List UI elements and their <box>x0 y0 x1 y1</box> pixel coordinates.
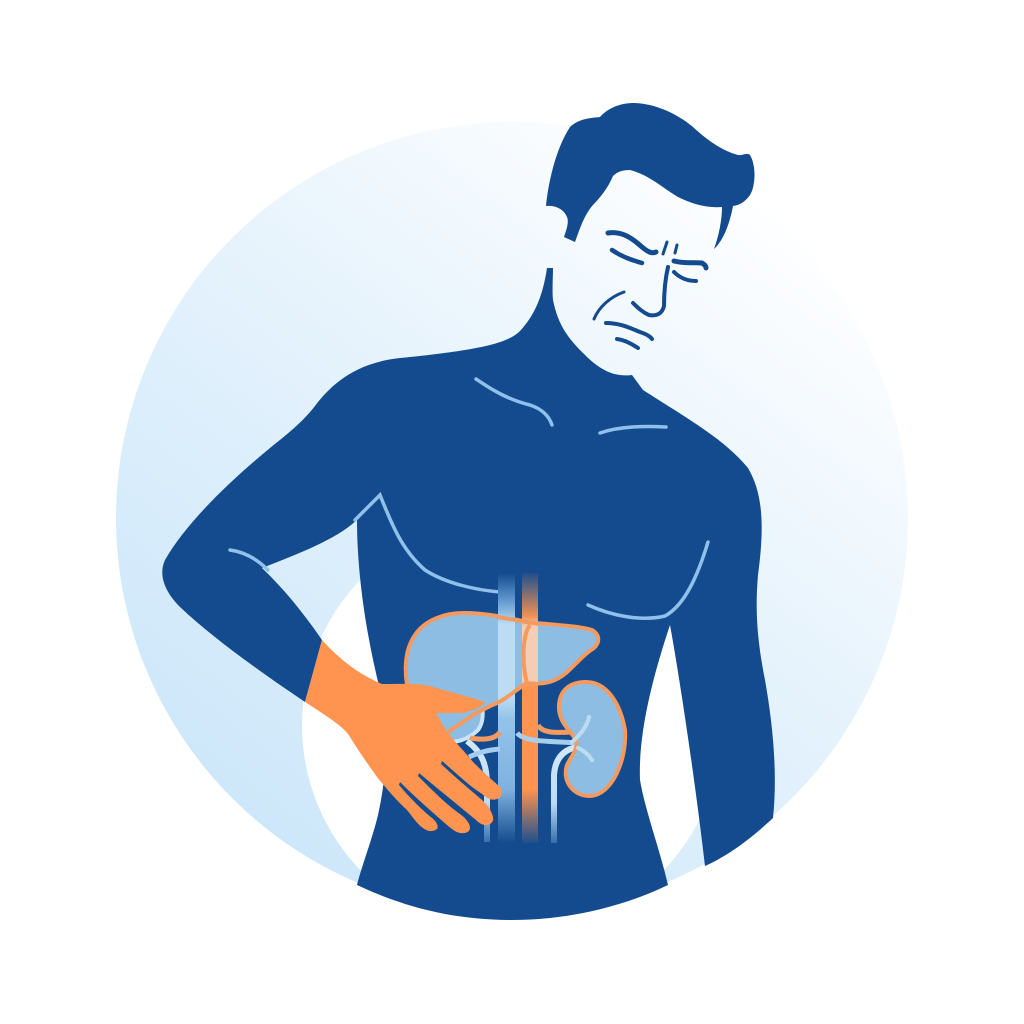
chest and arm contour lines <box>230 379 708 618</box>
inner white circle <box>302 515 722 935</box>
left brow <box>608 233 656 253</box>
background circle <box>116 122 908 914</box>
mouth <box>606 323 652 339</box>
renal arteries <box>470 725 572 739</box>
hair <box>546 103 754 249</box>
nose <box>633 267 668 315</box>
anatomy: organs and vessels <box>406 573 625 843</box>
lower lip <box>617 339 638 348</box>
liver lobe division <box>524 625 530 683</box>
liver <box>406 613 598 733</box>
right eye <box>674 272 696 281</box>
liver top edge over vessels <box>497 617 540 703</box>
figure body <box>162 268 775 920</box>
right kidney <box>559 682 625 796</box>
frown creases <box>663 242 677 254</box>
inferior vena cava <box>498 573 515 843</box>
left ureter <box>467 741 487 842</box>
cheek fold <box>594 292 624 319</box>
renal branches <box>572 717 592 760</box>
hand and forearm <box>305 640 502 833</box>
renal veins <box>469 733 580 757</box>
face lines <box>594 233 706 348</box>
left eye <box>612 250 642 263</box>
right ureter <box>554 747 577 843</box>
right brow <box>674 261 706 268</box>
left kidney <box>430 684 483 742</box>
aorta <box>522 573 538 843</box>
